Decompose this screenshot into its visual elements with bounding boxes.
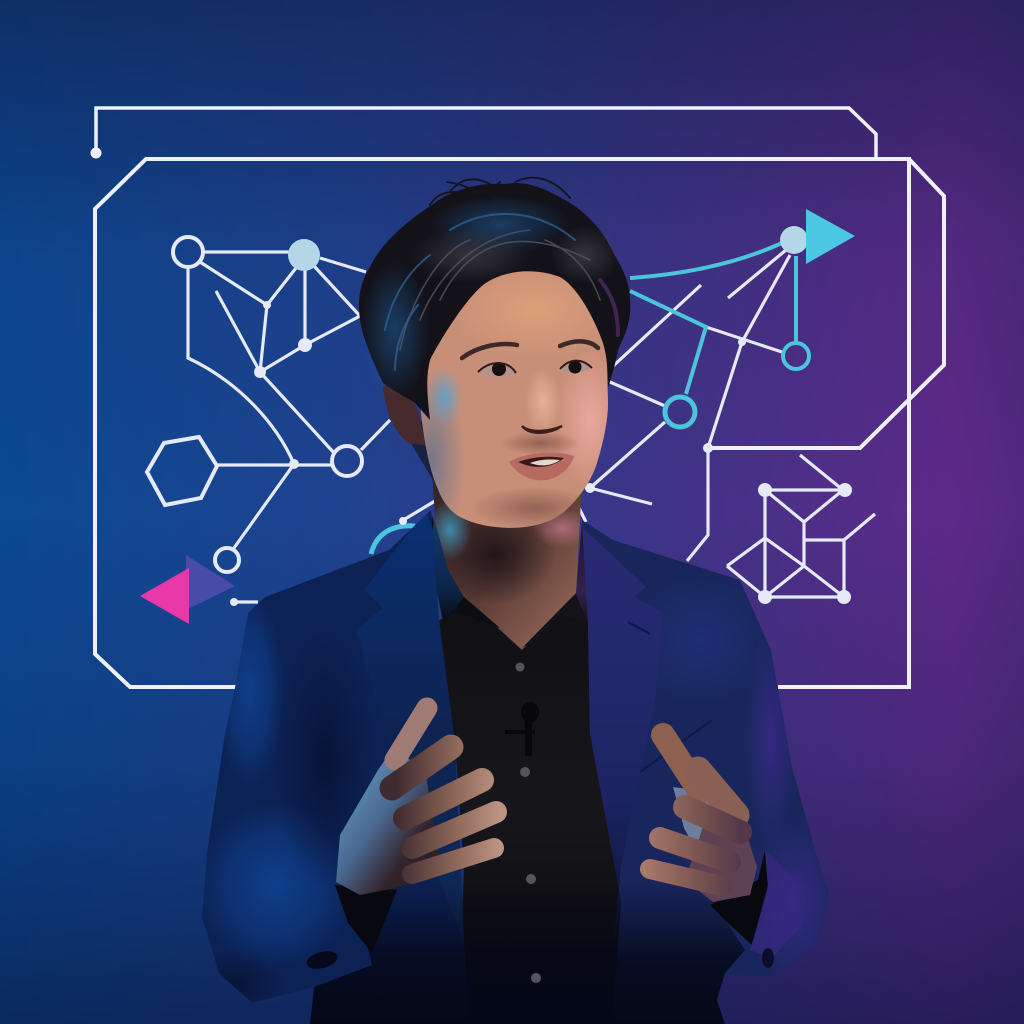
jacket pocket and buttonhole: [628, 622, 712, 772]
hair behind ear: [403, 420, 440, 490]
network: wireframe cube: [727, 455, 875, 604]
cyan arc behind shoulder: [371, 498, 440, 554]
jacket base left: [202, 510, 470, 1024]
right thumb: [663, 735, 700, 792]
right hand: [650, 735, 757, 902]
lapel microphone: [505, 702, 539, 756]
right hand back: [685, 790, 757, 902]
triangle: cyan arrow: [806, 209, 855, 264]
right inner palm: [673, 787, 712, 866]
eyes: [478, 360, 592, 377]
ear: [383, 384, 426, 445]
face shading: [421, 280, 608, 526]
right shirt cuff: [710, 850, 768, 945]
left fingers: [392, 708, 496, 874]
jacket base right: [582, 520, 829, 1024]
jacket hem shadow: [310, 880, 745, 1024]
left shirt cuff: [335, 885, 397, 953]
left hand: [336, 708, 496, 895]
mouth: [509, 453, 574, 480]
outer rear frame line: [90, 108, 876, 158]
right fingers: [650, 770, 740, 886]
jacket shading: [204, 594, 829, 1003]
person: [185, 178, 845, 1024]
left sleeve buttons: [304, 948, 340, 972]
shirt collar: [430, 515, 588, 648]
jacket: [185, 510, 845, 1024]
left lapel: [356, 510, 464, 943]
hair: [359, 178, 630, 420]
right lapel: [582, 527, 663, 960]
neck: [432, 479, 582, 650]
small connector stub: [230, 598, 258, 606]
left palm: [336, 748, 440, 895]
right sleeve buttons: [762, 948, 774, 968]
shirt: [438, 594, 621, 1024]
shirt buttons: [516, 662, 541, 983]
head: [359, 178, 630, 550]
nose: [522, 426, 562, 433]
hair highlights: [361, 260, 429, 400]
face base: [420, 262, 608, 528]
right sleeve cuff: [750, 850, 802, 958]
eyebrows: [462, 341, 598, 358]
network: left cluster: [147, 237, 390, 572]
triangles: magenta and violet: [140, 555, 235, 624]
main diagram frame: [95, 159, 944, 687]
network: right cluster: [576, 226, 809, 561]
